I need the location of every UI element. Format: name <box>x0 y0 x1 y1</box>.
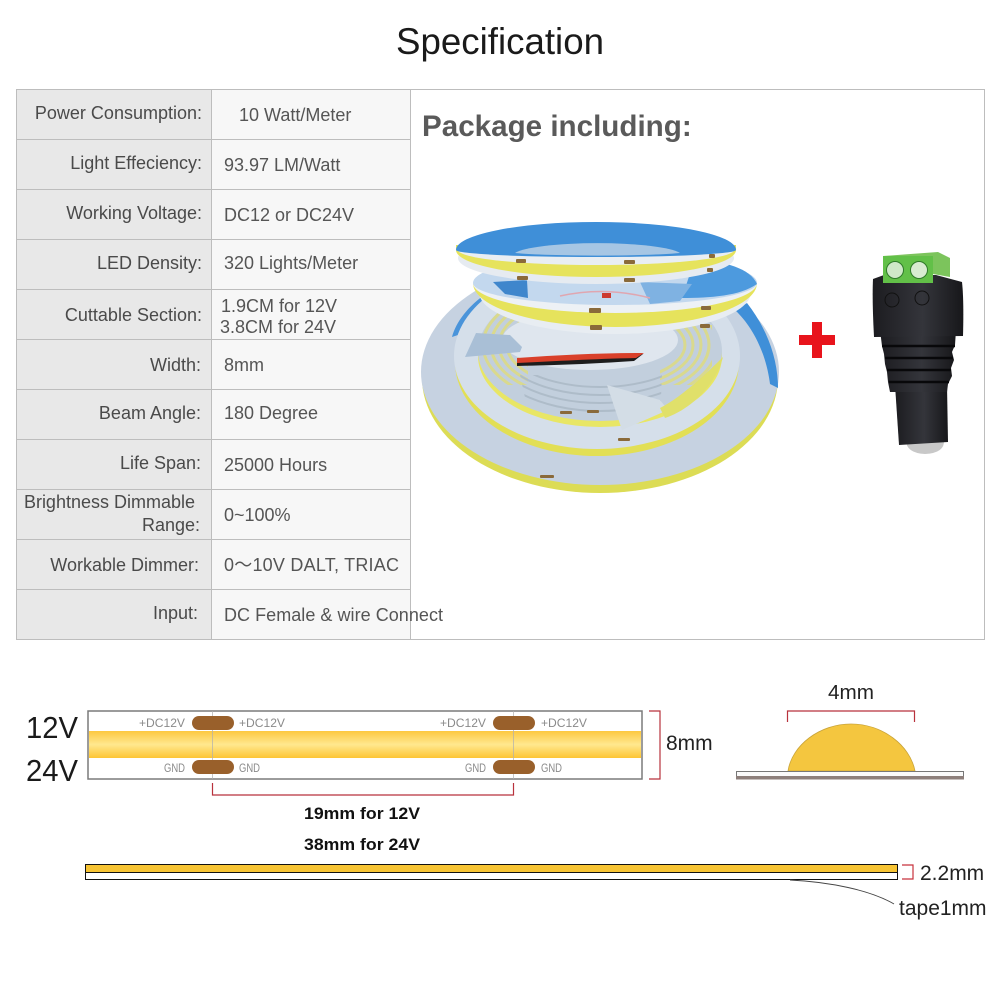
row: LED density: 320 Lights/Meter <box>224 253 358 273</box>
diagram: strip top view: 8mm <box>666 732 713 755</box>
solder pads <box>192 716 535 774</box>
row: life span <box>120 453 327 475</box>
row: power consumption: 10 Watt/Meter <box>239 105 351 125</box>
row: cuttable section: 3.8CM for 24V <box>220 317 336 337</box>
panel: specification table <box>16 90 984 640</box>
icon: DC female connector <box>873 252 963 454</box>
pad labels: GND <box>465 761 486 775</box>
pad labels: +DC12V <box>541 716 587 730</box>
row: working voltage: DC12 or DC24V <box>224 205 354 225</box>
8mm bracket <box>649 711 660 779</box>
row: life span: Life Span: <box>120 453 201 473</box>
row: light efficiency: 93.97 LM/Watt <box>224 155 340 175</box>
row: width: Width: <box>150 355 201 375</box>
row: workable dimmer: Workable Dimmer: <box>50 555 199 575</box>
pad labels: GND <box>164 761 185 775</box>
cut spacing bracket <box>212 783 514 795</box>
pad labels: GND <box>239 761 260 775</box>
row: beam angle <box>99 403 318 423</box>
row: working voltage <box>66 203 354 225</box>
strip outline <box>88 711 642 779</box>
pad labels: +DC12V <box>440 716 486 730</box>
voltage labels: 12V <box>26 710 78 745</box>
row: beam angle: Beam Angle: <box>99 403 201 423</box>
row: brightness dimmable range: 0~100% <box>224 505 291 525</box>
icon: red plus <box>799 322 835 358</box>
LED strip reels photo illustration <box>421 222 779 493</box>
diagram: strip top view: 38mm for 24V <box>304 835 421 854</box>
row: beam angle: 180 Degree <box>224 403 318 423</box>
inner coil <box>478 285 722 427</box>
row: brightness dimmable range <box>24 492 291 535</box>
housing <box>873 275 963 337</box>
row: working voltage: Working Voltage: <box>66 203 202 223</box>
diagram: cross section <box>736 681 964 780</box>
wound strip turns <box>483 313 712 385</box>
outer reel <box>422 263 778 493</box>
row: width <box>150 355 264 375</box>
row: power consumption <box>35 103 351 125</box>
pad labels: +DC12V <box>239 716 285 730</box>
cut strip tail <box>607 385 668 430</box>
row: cuttable section: Cuttable Section: <box>65 305 202 325</box>
second ring <box>473 255 757 334</box>
tape wedge <box>465 333 522 357</box>
row: power consumption: Power Consumption: <box>35 103 202 123</box>
row: brightness dimmable range: Range: <box>142 515 200 535</box>
row: input: Input: <box>153 603 198 623</box>
ribbed strain relief <box>880 330 956 392</box>
glowing COB band <box>89 731 641 758</box>
row: workable dimmer <box>50 555 399 575</box>
row: light efficiency <box>70 153 340 175</box>
solder pads on rings <box>516 254 715 478</box>
row: cuttable section: 1.9CM for 12V <box>221 296 337 316</box>
voltage labels <box>26 710 78 788</box>
row: width: 8mm <box>224 355 264 375</box>
row: light efficiency: Light Effeciency: <box>70 153 202 173</box>
row: brightness dimmable range: Brightness Dimmable <box>24 492 195 512</box>
row: input <box>153 603 443 625</box>
row: input: DC Female & wire Connect <box>224 605 443 625</box>
diagram: side view: 2.2mm <box>920 862 984 885</box>
pad labels <box>139 716 587 775</box>
pad labels: +DC12V <box>139 716 185 730</box>
row: LED density <box>97 253 358 273</box>
pad labels: GND <box>541 761 562 775</box>
row: LED density: LED Density: <box>97 253 202 273</box>
diagram: strip top view <box>26 710 713 854</box>
row: life span: 25000 Hours <box>224 455 327 475</box>
title: Specification <box>396 21 604 62</box>
green terminal <box>883 252 950 277</box>
voltage labels: 24V <box>26 753 78 788</box>
middle coil <box>455 268 739 456</box>
top ring <box>456 222 736 284</box>
barrel <box>906 440 944 454</box>
row: workable dimmer: 0～10V DALT, TRIAC <box>224 555 399 575</box>
diagram: side view <box>86 862 987 920</box>
row: cuttable section <box>65 296 337 337</box>
heading: package including: Package including: <box>422 110 692 143</box>
diagram: cross section: 4mm <box>828 681 874 704</box>
diagram: strip top view: 19mm for 12V <box>304 804 421 823</box>
diagram: side view: tape1mm <box>899 897 987 920</box>
red and black wire <box>517 354 643 366</box>
